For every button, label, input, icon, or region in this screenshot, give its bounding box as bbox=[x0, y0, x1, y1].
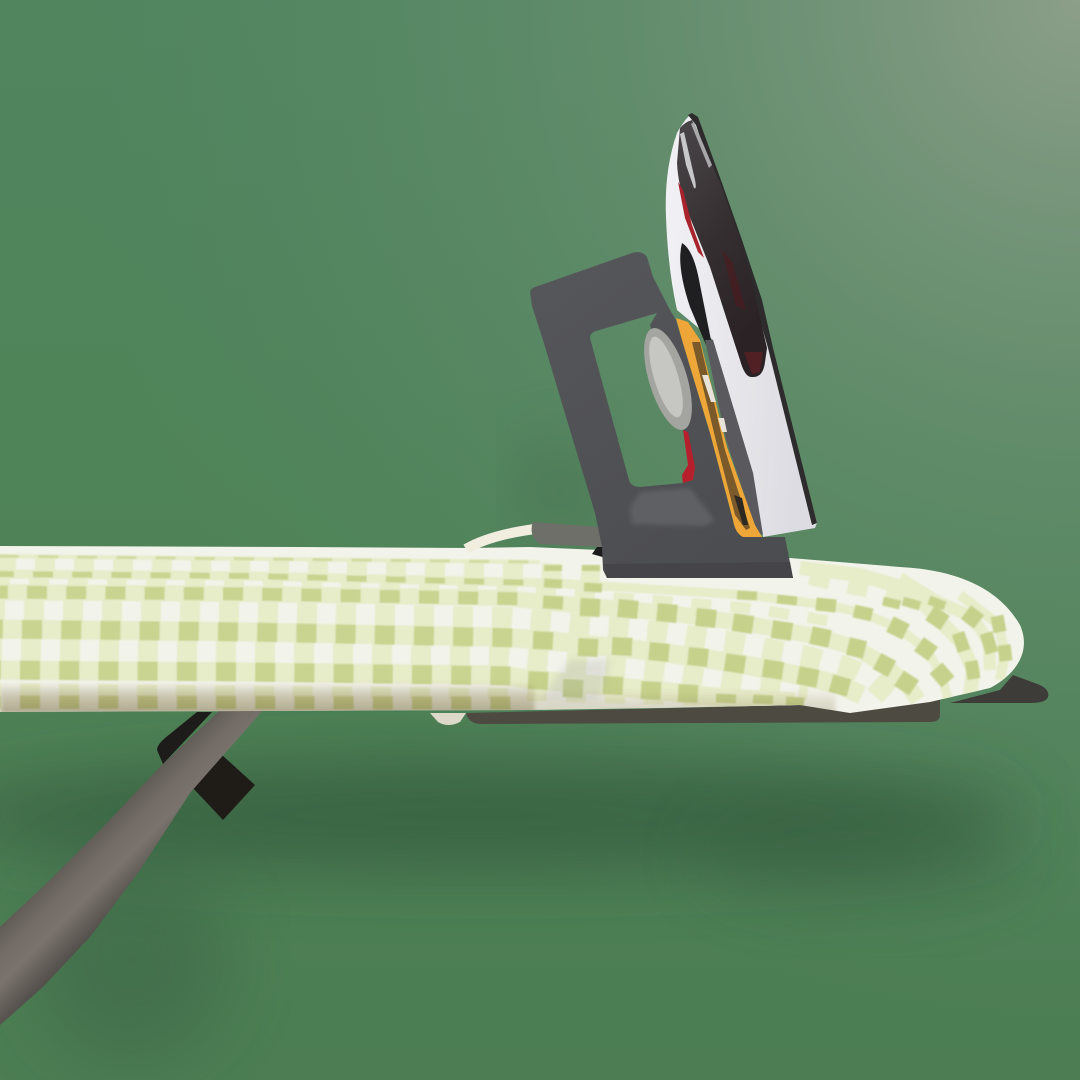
oval opening bbox=[680, 243, 712, 345]
dark reflection bbox=[677, 120, 767, 377]
iron base bbox=[603, 562, 793, 578]
cloth underside shadow bbox=[0, 684, 538, 712]
chrome body bbox=[666, 113, 817, 537]
grip texture bbox=[630, 488, 714, 526]
orange trim bbox=[676, 318, 762, 537]
power cord bbox=[466, 522, 606, 558]
metal board underside bbox=[430, 675, 1048, 725]
ironing board cover with gingham bbox=[0, 540, 1040, 720]
orange vent slot bbox=[692, 342, 750, 530]
iron bbox=[530, 113, 817, 578]
red interior accent bbox=[682, 430, 695, 483]
gingham horizontal bands bbox=[0, 556, 1005, 702]
gingham dark squares: right rows bbox=[528, 568, 1006, 702]
outer soleplate edge bbox=[688, 113, 817, 525]
gingham dark squares: left rows bbox=[0, 556, 540, 703]
leg clamp bracket bbox=[157, 712, 255, 820]
handle body bbox=[530, 252, 793, 578]
grey strip bbox=[705, 340, 763, 535]
ironing board leg bbox=[0, 710, 263, 1025]
circular dial bbox=[634, 323, 702, 435]
gingham stripes between rows bbox=[0, 565, 920, 700]
